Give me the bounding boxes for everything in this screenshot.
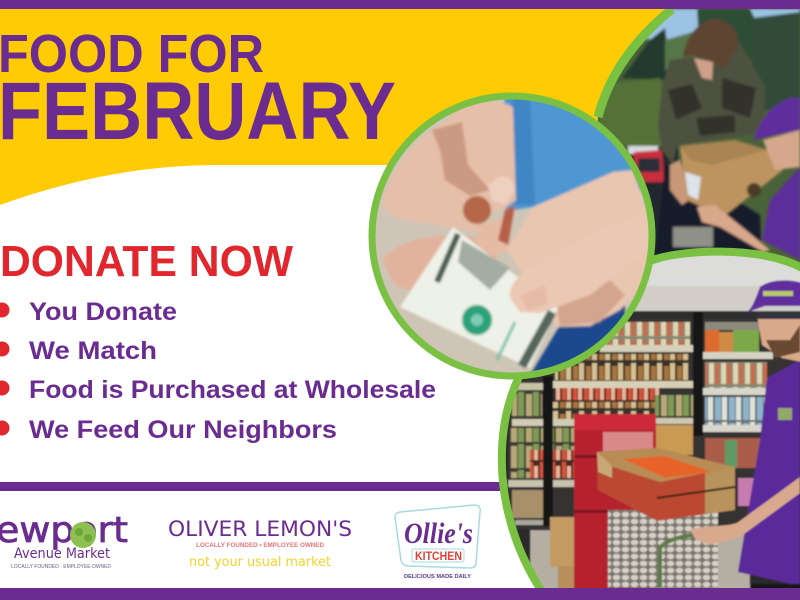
left finger and palm bbox=[382, 235, 500, 295]
logo: Ollie's Kitchen: Ollie's bbox=[404, 517, 473, 550]
right fridge shelves bbox=[705, 322, 763, 330]
middle fridge shelves bbox=[600, 322, 690, 346]
green arc of top photo bbox=[598, 9, 672, 117]
step: You Donate: You Donate bbox=[29, 298, 177, 326]
logo: Ollie's Kitchen bbox=[395, 505, 480, 580]
red crates bbox=[574, 414, 656, 590]
thumb bbox=[508, 274, 606, 314]
photo: store team member with cart bbox=[495, 250, 800, 590]
purple divider above logos bbox=[0, 482, 520, 491]
logo: Ollie's Kitchen: DELICIOUS MADE DAILY bbox=[404, 574, 471, 580]
purple top bar bbox=[0, 0, 800, 9]
list of donation steps bbox=[0, 298, 436, 444]
photo: volunteers loading a box bbox=[590, 9, 800, 270]
index and thumb hand bbox=[382, 102, 516, 232]
tomato boxes bbox=[597, 472, 735, 521]
logo: Ollie's Kitchen: KITCHEN bbox=[415, 551, 462, 563]
right palm bbox=[507, 170, 650, 327]
man in purple bbox=[738, 360, 800, 586]
purple bottom bar bbox=[0, 588, 800, 600]
cart of eggs bbox=[608, 510, 718, 588]
floor bbox=[530, 530, 750, 590]
logo: Newport Avenue Market: Avenue Market bbox=[14, 546, 110, 562]
step: We Feed Our Neighbors: We Feed Our Neighbors bbox=[29, 416, 337, 444]
logo: Newport Avenue Market bbox=[0, 510, 128, 570]
step: Food is Purchased at Wholesale: Food is Purchased at Wholesale bbox=[29, 376, 436, 404]
logo: Oliver Lemon's: not your usual market bbox=[189, 555, 331, 570]
dollar bill bbox=[400, 227, 558, 368]
logo: Oliver Lemon's: OLIVER LEMON'S bbox=[168, 517, 352, 541]
heading: FOOD FOR: FOOD FOR bbox=[0, 24, 264, 84]
logo: Oliver Lemon's bbox=[168, 517, 352, 570]
yellow header band bbox=[0, 9, 700, 205]
subheading: DONATE NOW: DONATE NOW bbox=[0, 237, 293, 286]
heading: FEBRUARY: FEBRUARY bbox=[0, 66, 396, 157]
left fridge shelves bbox=[512, 383, 550, 390]
green arc of bottom photo bbox=[502, 252, 800, 590]
step: We Match: We Match bbox=[29, 337, 157, 365]
cardboard boxes on floor bbox=[548, 516, 576, 568]
photo circle: hands with dollar and coin bbox=[370, 90, 660, 380]
icon: artichoke bbox=[70, 522, 96, 548]
logo: Newport Avenue Market: LOCALLY FOUNDED · EMPLOYEE OWNED bbox=[11, 564, 111, 570]
logo: Oliver Lemon's: LOCALLY FOUNDED • EMPLOYEE OWNED bbox=[196, 542, 324, 549]
